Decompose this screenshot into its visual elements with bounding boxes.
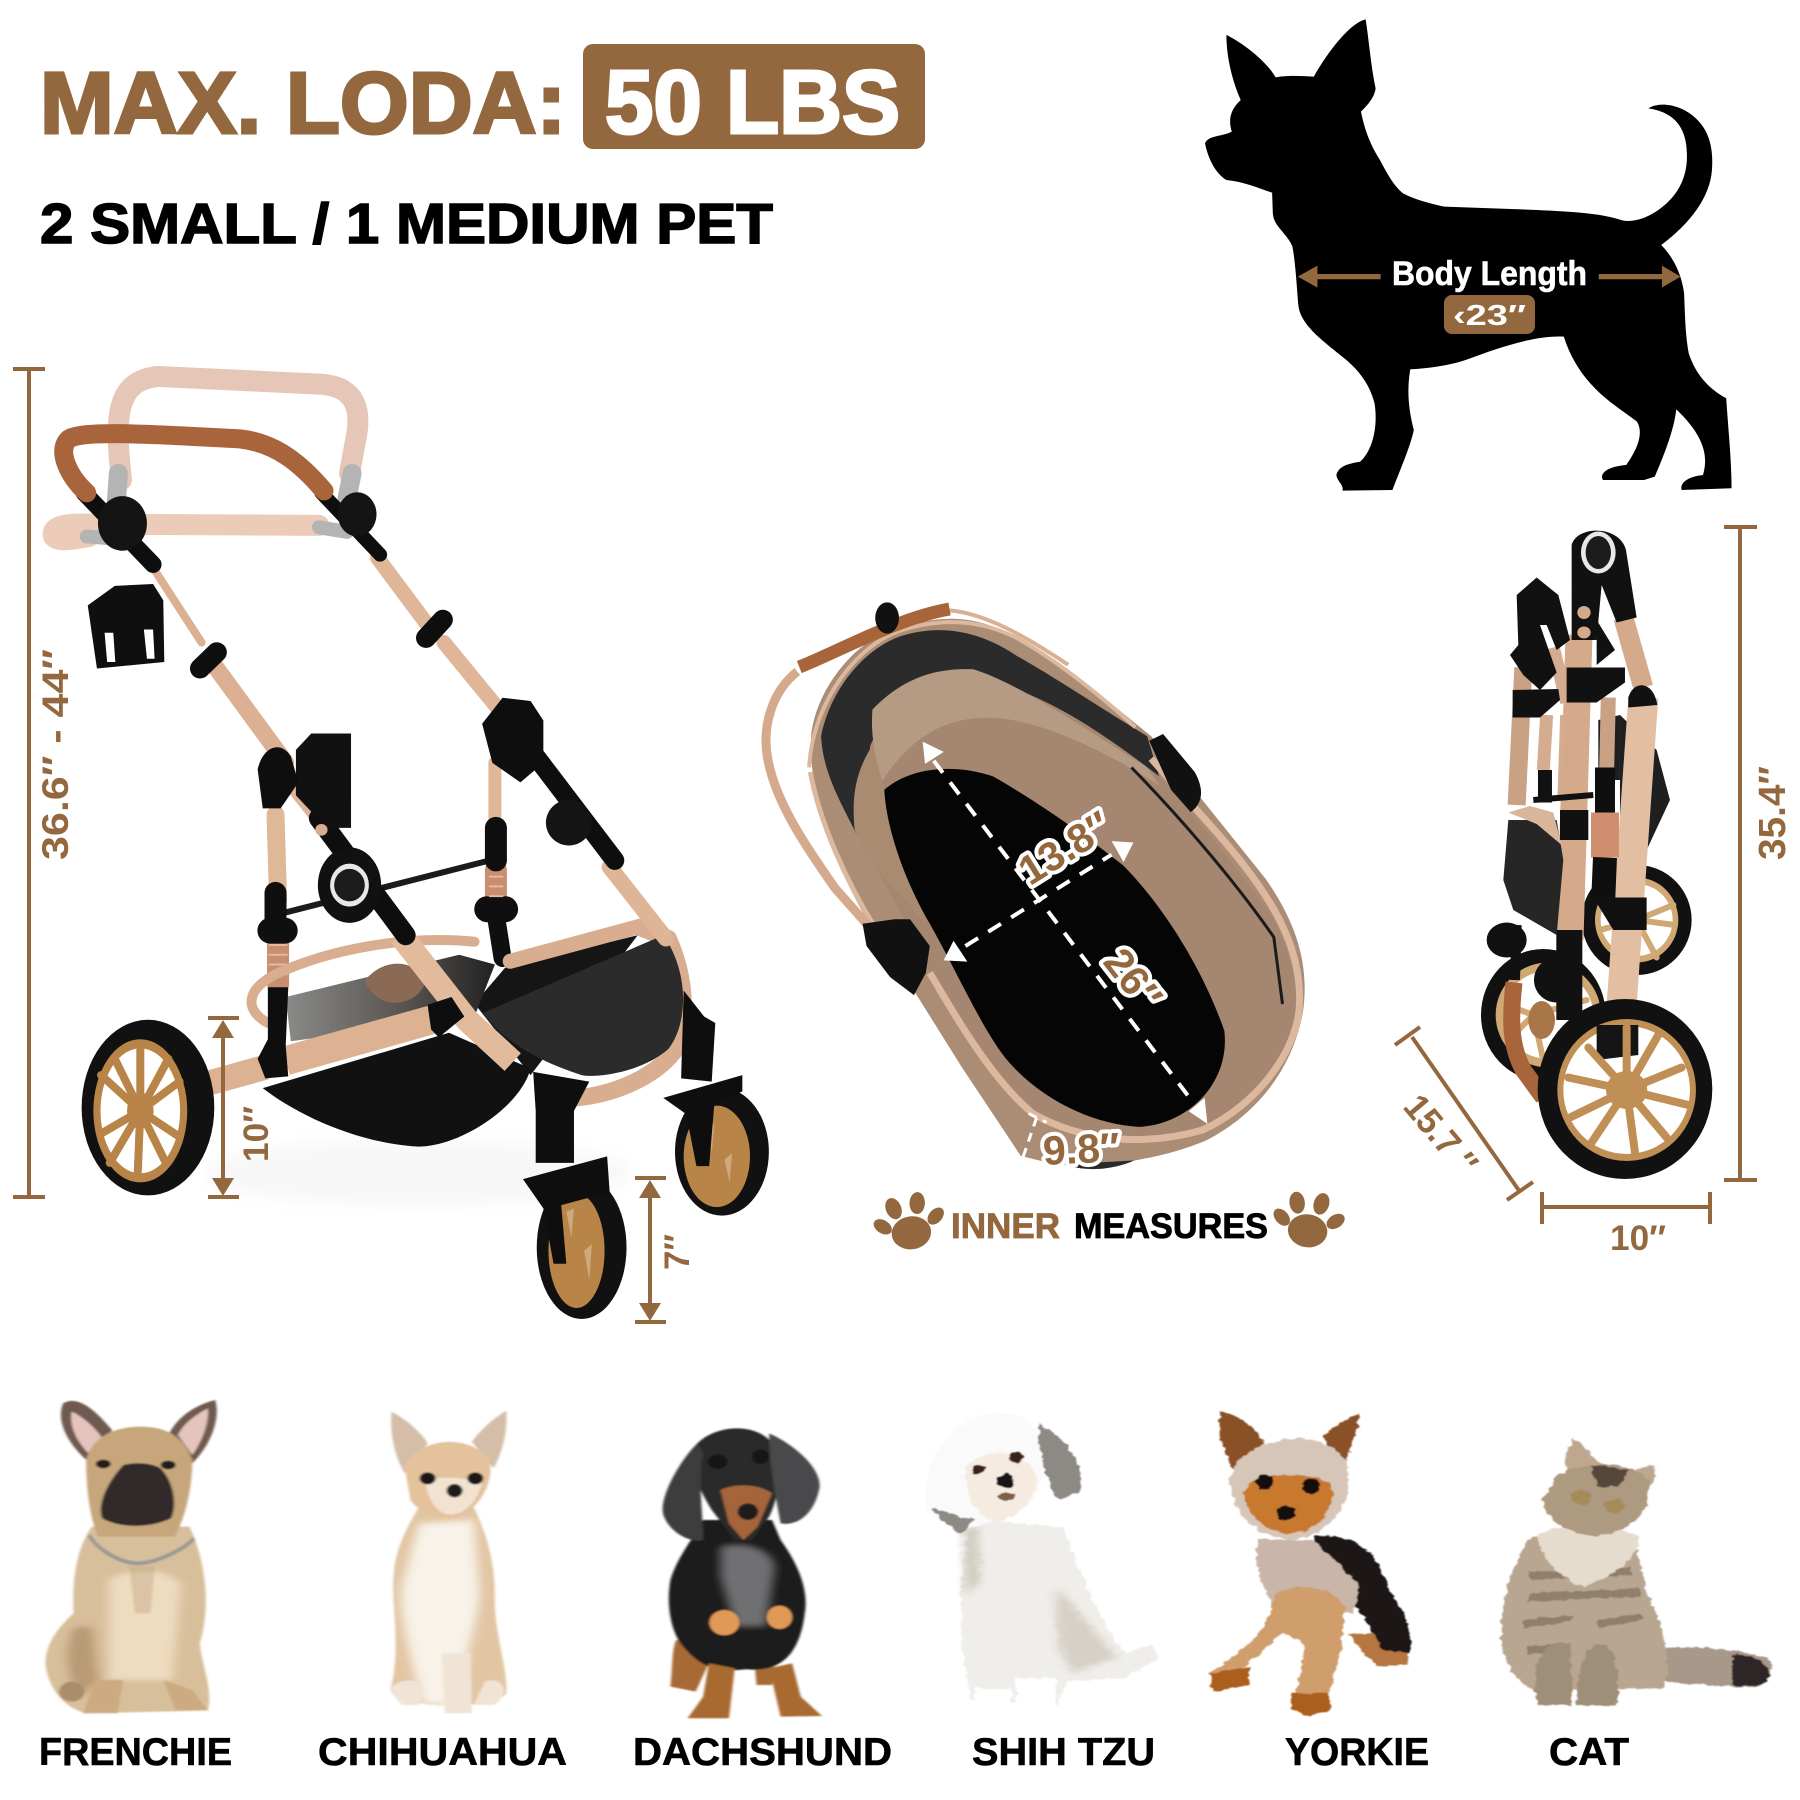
carry handle (766, 672, 874, 933)
rods (286, 857, 503, 912)
left clamp (863, 919, 930, 995)
black post and springs (278, 870, 496, 984)
front right wheel (663, 1075, 769, 1216)
pet: frenchie: FRENCHIE (39, 1731, 232, 1774)
bassinet measures (1010, 802, 1171, 1174)
handle joints (98, 496, 147, 551)
mesh pocket (286, 955, 495, 1041)
black arm (319, 818, 406, 935)
back right wheel (1582, 865, 1692, 975)
inner measures label: MEASURES (1074, 1207, 1268, 1246)
white arrow heads (923, 742, 1207, 1124)
leather grip (799, 609, 950, 667)
dimension: folded width 10: 10″ (1610, 1219, 1666, 1258)
pet: chihuahua: CHIHUAHUA (318, 1731, 567, 1774)
bassinet measures: 26″ (1095, 940, 1171, 1019)
icon: paw right (1266, 1185, 1351, 1252)
pet: frenchie (39, 1400, 232, 1774)
dimension: front wheel 7 in: 7″ (658, 1234, 697, 1270)
tubes (1517, 668, 1523, 805)
black brackets (1510, 578, 1570, 690)
title: max load: MAX. LODA: (40, 55, 566, 152)
leather handle (1512, 982, 1543, 1098)
gold rim (930, 759, 1300, 1140)
folding hinge blocks (296, 734, 351, 828)
pet: yorkie: YORKIE (1285, 1731, 1429, 1774)
black pad (884, 769, 1225, 1127)
canopy mesh (821, 630, 1159, 834)
dimension: front wheel 7 in (635, 1178, 697, 1322)
fabric lining (859, 676, 1297, 1137)
rear wheel (82, 1020, 214, 1195)
black frame parts (533, 991, 715, 1163)
dashed measure lines (934, 761, 1195, 1105)
pet: cat (1501, 1438, 1771, 1774)
back left wheel (1481, 949, 1606, 1081)
hub white ring (1581, 532, 1616, 574)
dog silhouette with body length: ‹23″ (1453, 300, 1526, 332)
pet: dachshund: DACHSHUND (633, 1731, 892, 1774)
dimension: rear wheel 10 in (208, 1018, 276, 1197)
frame joint at footrest (428, 997, 464, 1037)
zipper (1131, 767, 1282, 1004)
badge: 50 lbs: 50 LBS (605, 53, 900, 153)
dog silhouette with body length (1205, 19, 1732, 491)
upper frame tubes (153, 568, 202, 642)
basket rim (251, 940, 474, 1023)
outer fabric shell (811, 619, 1305, 1165)
dimension: folded width 10 (1542, 1192, 1710, 1258)
inner measures label (867, 1185, 1351, 1255)
pet: shih tzu (925, 1413, 1158, 1774)
canopy fold (872, 669, 1159, 785)
pet: chihuahua (318, 1411, 567, 1774)
folded stroller photo (1481, 531, 1712, 1179)
dimension: folded depth 15.7 (1395, 1027, 1533, 1200)
ground shadow (204, 1140, 633, 1205)
bassinet underside (1048, 1145, 1147, 1169)
dimension: rear wheel 10 in: 10″ (237, 1106, 276, 1162)
dimension: height 36.6 to 44: 36.6″ - 44″ (35, 649, 76, 860)
bassinet photo (766, 602, 1305, 1169)
dimension: height 36.6 to 44 (13, 369, 76, 1197)
dog silhouette with body length: Body Length (1392, 255, 1587, 293)
right clamp (1149, 734, 1201, 812)
brown leather handle (64, 434, 324, 493)
footrest panel (1503, 820, 1563, 935)
icon: paw left (867, 1187, 952, 1255)
footrest fabric (1620, 715, 1670, 850)
rear frame tubes (276, 815, 278, 899)
bassinet measures: 13.8″ (1010, 802, 1119, 894)
pet: cat: CAT (1549, 1731, 1629, 1774)
main stroller photo (53, 376, 769, 1319)
dimension: folded height 35.4 (1724, 527, 1794, 1180)
hub: white ring (318, 847, 381, 923)
side tube (286, 1018, 439, 1061)
dimension: folded height 35.4: 35.4″ (1752, 766, 1794, 860)
basket (263, 1033, 531, 1147)
front wheel (1538, 999, 1712, 1179)
ghost handle upper and lower (118, 376, 358, 480)
front footrest tube (577, 929, 683, 1098)
pet: shih tzu: SHIH TZU (972, 1731, 1155, 1774)
pet: yorkie (1210, 1411, 1429, 1774)
under-footrest dark fill (474, 935, 638, 1075)
footrest seat (482, 935, 683, 1076)
bassinet measures: 9.8″ (1042, 1124, 1121, 1174)
cup holder (88, 584, 164, 669)
front left wheel (523, 1156, 627, 1319)
dimension: folded depth 15.7: 15.7 ″ (1396, 1086, 1486, 1183)
pet: dachshund (633, 1428, 892, 1774)
subtitle: pet capacity: 2 SMALL / 1 MEDIUM PET (40, 192, 773, 256)
inner measures label: INNER (951, 1207, 1060, 1246)
